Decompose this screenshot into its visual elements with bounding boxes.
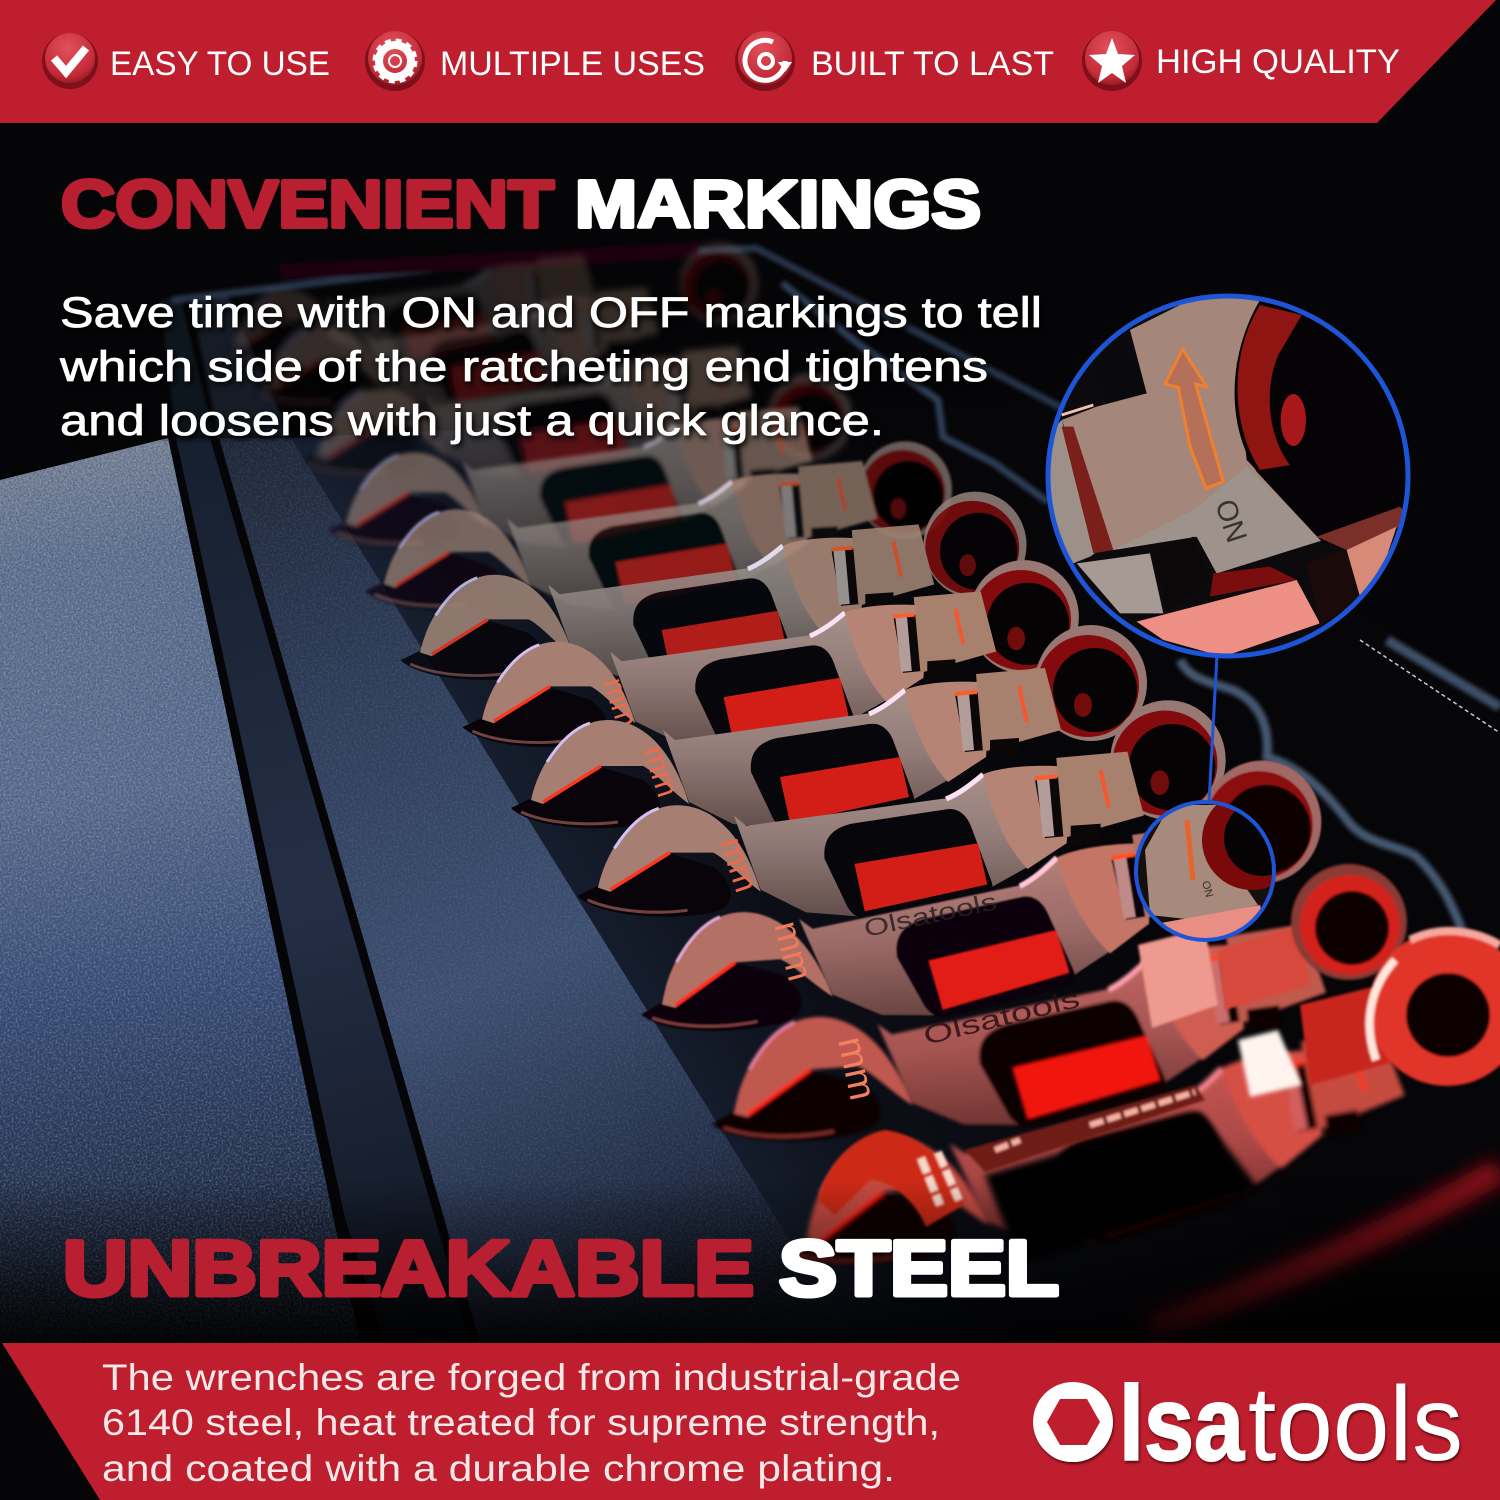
pink reflection on row H plate — [1138, 928, 1218, 1028]
steel description: 6140 steel, heat treated for supreme strength, — [102, 1402, 940, 1443]
feature: built to last — [735, 31, 1054, 91]
mm mark row H: mm — [829, 1033, 883, 1104]
ON text: ON — [1208, 495, 1253, 547]
wrench row G — [631, 761, 1321, 1038]
tray rim band — [176, 438, 470, 1343]
tray outer edge lines — [1360, 640, 1500, 733]
top banner — [0, 0, 1496, 123]
steel description: The wrenches are forged from industrial-grade — [102, 1357, 961, 1398]
bottom fade — [0, 1180, 1500, 1345]
faint far wrenches — [221, 242, 852, 479]
far rim of tray — [160, 248, 1085, 502]
photo background: black tray scene — [0, 240, 1500, 1343]
mm mark row E: mm — [636, 741, 686, 801]
steel description: and coated with a durable chrome plating. — [102, 1448, 895, 1489]
feature: multiple uses — [365, 31, 705, 91]
brand mark row G: Olsatools — [862, 888, 999, 943]
icon: star — [1082, 31, 1142, 91]
feature: easy to use — [42, 33, 330, 89]
black slot — [1142, 390, 1147, 394]
wrench row F — [577, 700, 1226, 919]
white light flare — [1238, 1030, 1302, 1097]
description paragraph: and loosens with just a quick glance. — [60, 397, 884, 445]
fabric surface — [0, 438, 360, 1343]
heading: unbreakable steel — [63, 1224, 1059, 1312]
tray inner bed — [291, 400, 1500, 1343]
large lens — [1040, 290, 1420, 660]
label: EASY TO USE — [110, 45, 330, 83]
wrench row C — [401, 492, 1027, 682]
wrench row H — [701, 923, 1334, 1149]
mm mark row D: mm — [596, 674, 643, 732]
logo: Olsatools: lsa — [1119, 1365, 1245, 1483]
label: MULTIPLE USES — [440, 45, 705, 83]
icon: check mark — [42, 33, 98, 89]
steel description — [102, 1357, 961, 1489]
tray lower edge glow — [1150, 1170, 1500, 1330]
logo: Olsatools: tools — [1248, 1365, 1463, 1483]
wrench set — [221, 242, 1500, 1276]
tray scalloped edge — [1180, 660, 1462, 930]
front wrench jaw — [818, 1130, 964, 1227]
wrench row B — [366, 441, 952, 612]
wrench row E — [511, 625, 1147, 830]
lower wedge — [1077, 553, 1163, 613]
mm mark row F: mm — [713, 833, 766, 896]
description paragraph: which side of the ratcheting end tightens — [59, 343, 988, 391]
feature: high quality — [1082, 31, 1400, 91]
label: BUILT TO LAST — [811, 45, 1054, 83]
metal plate — [1062, 297, 1323, 573]
logo: Olsatools — [1033, 1363, 1463, 1484]
label: HIGH QUALITY — [1156, 43, 1400, 81]
description paragraph — [59, 289, 1042, 445]
heading: unbreakable steel: UNBREAKABLE — [63, 1224, 754, 1312]
bottom banner — [2, 1343, 1500, 1500]
logo: Olsatools: O — [1033, 1363, 1113, 1484]
description paragraph: Save time with ON and OFF markings to tell — [60, 289, 1042, 337]
icon: refresh gear — [735, 31, 795, 91]
heading: convenient markings — [61, 167, 981, 242]
small lens on wrench: ON — [1199, 880, 1215, 899]
wrench row I — [768, 1024, 1417, 1276]
heading: convenient markings: CONVENIENT — [61, 167, 554, 242]
magnifier callout: ON marking — [1040, 290, 1420, 945]
heading: unbreakable steel: STEEL — [779, 1224, 1059, 1312]
tray leather wall — [215, 430, 865, 1350]
dark pocket over row I grip — [985, 1112, 1260, 1265]
mm mark row G: mm — [766, 916, 821, 985]
salmon reflection — [1137, 580, 1320, 657]
front wrench handle — [965, 1085, 1205, 1172]
icon: gear — [365, 31, 425, 91]
small lens on wrench — [1134, 800, 1276, 942]
heading: convenient markings: MARKINGS — [575, 167, 981, 242]
wrench row D — [463, 560, 1079, 749]
connector line — [1209, 655, 1217, 802]
ratchet ring — [1234, 301, 1324, 541]
row I head ring — [1300, 930, 1500, 1086]
wrench row A — [329, 406, 813, 549]
row H head ring — [1218, 864, 1407, 1010]
arrow marking — [1165, 349, 1223, 488]
brand mark row H: Olsatools — [920, 983, 1083, 1051]
